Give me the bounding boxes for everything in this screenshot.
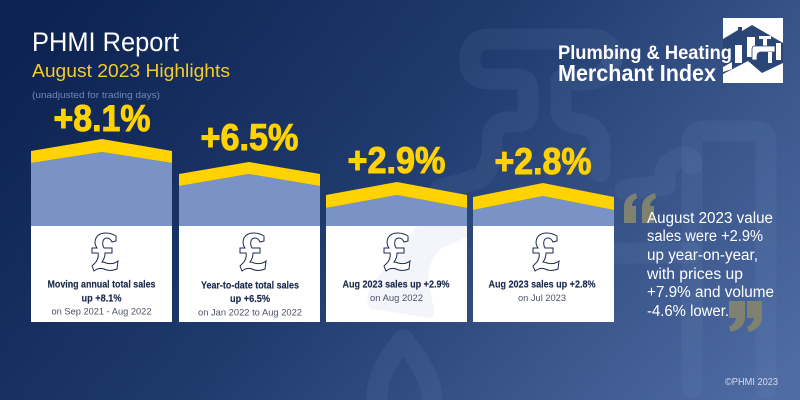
panel 4 value: +2.8% <box>494 141 592 182</box>
panel 3 label: Aug 2023 sales up +2.9% <box>342 278 450 290</box>
quote text: with prices up <box>646 266 743 283</box>
subtitle: August 2023 Highlights <box>32 60 230 81</box>
logo text line 2: Merchant Index <box>558 60 716 86</box>
title: PHMI Report <box>32 27 179 57</box>
panel 1 value: +8.1% <box>54 98 150 139</box>
panel 2 white card <box>179 226 320 322</box>
panel 3 label: on Aug 2022 <box>370 293 423 304</box>
quote text: August 2023 value <box>647 210 773 227</box>
panel 1: moving annual total sales <box>31 98 172 322</box>
opening quote mark <box>624 193 656 223</box>
panel 4 blue roof <box>473 196 614 226</box>
panel 1 label <box>48 278 156 318</box>
panel 4 white card <box>473 226 614 322</box>
panel 1 blue roof <box>31 152 172 226</box>
quote text: up year-on-year, <box>647 247 758 264</box>
panel 2 label: Year-to-date total sales <box>201 280 299 292</box>
panel 3 yellow roof <box>326 182 467 208</box>
panel 3 blue roof <box>326 195 467 226</box>
panel 1 label: up +8.1% <box>82 292 122 304</box>
logo <box>558 18 783 86</box>
panel 4 label <box>488 278 596 304</box>
logo text line 1: Plumbing & Heating <box>558 43 732 64</box>
panel 1 label: Moving annual total sales <box>48 278 156 290</box>
icon: pound <box>92 233 118 271</box>
note: (unadjusted for trading days) <box>32 90 160 101</box>
panel 3 white card <box>326 226 467 322</box>
panel 2 yellow roof <box>179 162 320 186</box>
card watermark <box>367 226 467 318</box>
panel 3: August 2023 sales on August 2022 <box>326 140 467 322</box>
panel 4 label: on Jul 2023 <box>518 293 566 304</box>
quote text <box>646 210 774 320</box>
panel 1 white card <box>31 226 172 322</box>
panel 2 label <box>198 280 302 318</box>
panel 2 label: up +6.5% <box>230 293 271 305</box>
panel 4 yellow roof <box>473 183 614 210</box>
panel 3 label <box>342 278 450 304</box>
background watermark: plumbing pipes <box>377 39 766 400</box>
icon: pound <box>240 233 266 271</box>
panel 2 value: +6.5% <box>200 117 298 158</box>
quote text: +7.9% and volume <box>647 284 774 301</box>
panel 4: August 2023 sales on July 2023 <box>473 141 614 322</box>
panel 2 label: on Jan 2022 to Aug 2022 <box>198 308 302 318</box>
logo house mark <box>723 18 783 83</box>
panel 3 value: +2.9% <box>348 140 446 181</box>
panel 2 blue roof <box>179 174 320 226</box>
panel 1 label: on Sep 2021 - Aug 2022 <box>52 306 152 318</box>
copyright: ©PHMI 2023 <box>725 376 778 388</box>
panel 4 label: Aug 2023 sales up +2.8% <box>488 278 596 290</box>
quote text: sales were +2.9% <box>647 228 763 245</box>
icon: pound <box>533 233 559 271</box>
panel 1 yellow roof <box>31 139 172 163</box>
quote text: -4.6% lower. <box>647 303 729 320</box>
icon: pound <box>384 233 410 271</box>
closing quote mark <box>729 301 762 332</box>
panel 2: year-to-date total sales <box>179 117 320 322</box>
